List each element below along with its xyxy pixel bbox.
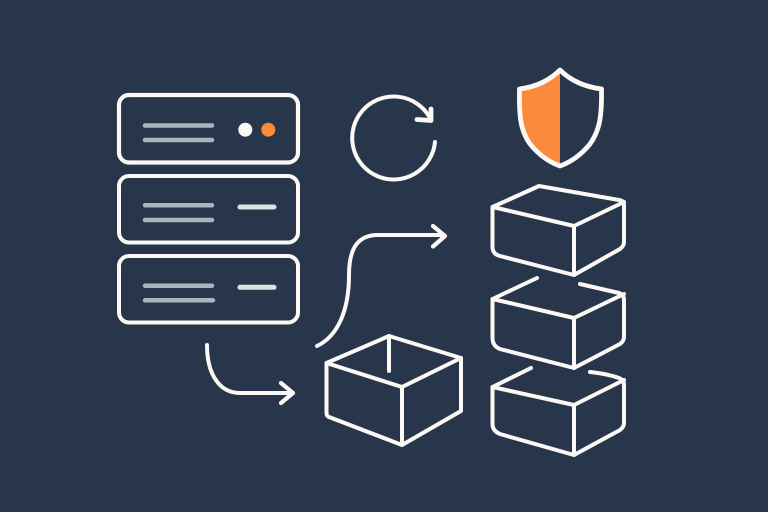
icon: security shield half orange [519,70,602,166]
box: middle stacked box with open lid [492,278,624,368]
panel: server unit 1 [119,95,298,162]
box: open box [326,336,461,445]
box: bottom stacked box with open lid [492,368,624,455]
panel: server unit 3 [119,256,298,322]
box: top stacked box [492,186,624,275]
icon: circular refresh arrow [352,96,435,179]
panel: server unit 2 [119,176,298,242]
arrow: S-curve arrow from open box upward [317,226,445,346]
arrow: curved arrow from servers to open box [207,345,293,403]
